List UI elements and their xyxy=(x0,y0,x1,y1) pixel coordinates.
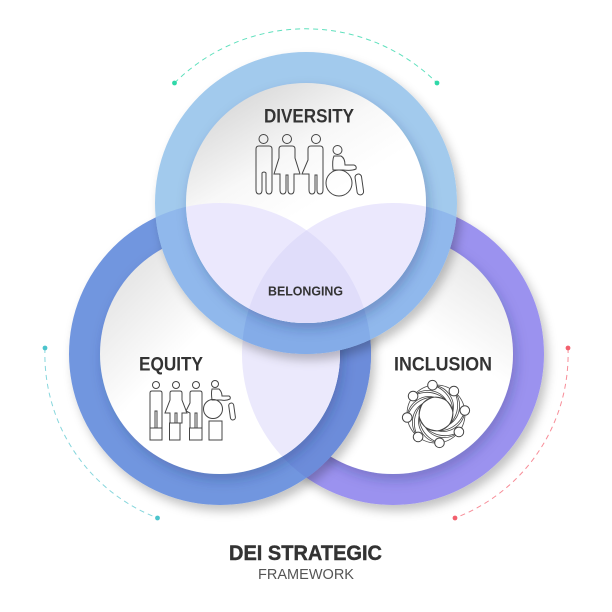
overlap: belonging xyxy=(249,230,364,323)
icon: people on boxes xyxy=(150,380,236,440)
ring: equity xyxy=(69,203,371,505)
overlap: equity and inclusion xyxy=(242,340,340,456)
dashed arc: left xyxy=(43,346,160,520)
subtitle: FRAMEWORK xyxy=(258,566,354,583)
heading: equity: EQUITY xyxy=(139,354,203,376)
icon: diverse people xyxy=(256,134,364,196)
heading: diversity: DIVERSITY xyxy=(264,106,354,128)
ring: diversity xyxy=(155,52,457,354)
ring: inclusion xyxy=(242,203,544,505)
heading: belonging: BELONGING xyxy=(268,284,343,298)
icon: connected circle of people xyxy=(402,380,470,448)
dashed arc: right xyxy=(453,346,570,520)
heading: inclusion: INCLUSION xyxy=(394,354,492,376)
title: DEI STRATEGIC xyxy=(229,542,382,565)
disc: diversity xyxy=(186,83,426,323)
dashed arc: top xyxy=(172,29,439,85)
